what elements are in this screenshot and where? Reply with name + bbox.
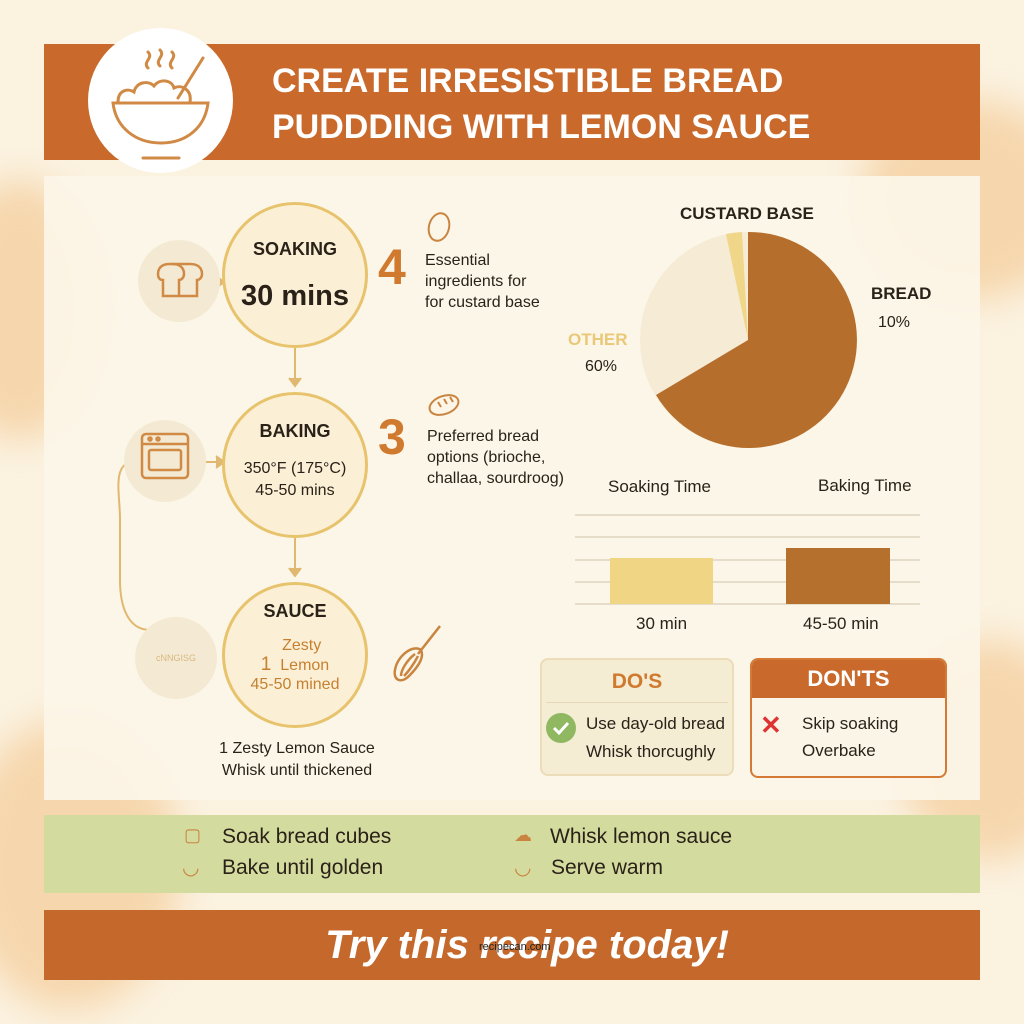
step: sauce: 45-50 mined <box>251 676 339 693</box>
step: baking: BAKING <box>260 421 330 441</box>
header band <box>44 44 980 160</box>
bar chart <box>575 476 920 633</box>
summary band: Soak bread cubes <box>222 825 391 848</box>
don'ts box: DON'TS <box>807 666 890 691</box>
fact: 4 ingredients: 4 <box>378 239 406 295</box>
fact: 4 ingredients <box>378 212 540 311</box>
step: sauce: 1 Lemon <box>261 654 329 675</box>
step: soaking: SOAKING <box>253 239 337 259</box>
step: soaking: 30 mins <box>241 280 349 312</box>
don'ts box <box>750 658 947 778</box>
icon: cross: ✕ <box>760 710 782 740</box>
summary band <box>44 815 980 893</box>
bar chart: 30 min <box>636 614 687 633</box>
side icon: faded label: cNNGISG <box>156 653 196 663</box>
pie chart <box>568 204 931 448</box>
summary band: Bake until golden <box>222 856 383 879</box>
footer banner: Try this recipe today! <box>325 923 729 967</box>
sauce caption: Whisk until thickened <box>222 762 372 779</box>
icon: check <box>546 713 576 743</box>
side icon: faded label <box>135 617 217 699</box>
sauce caption <box>219 740 375 779</box>
bar chart: Soaking Time <box>608 477 711 496</box>
step: baking: 45-50 mins <box>255 482 335 499</box>
fact: 3 breads: 3 <box>378 409 406 465</box>
do's box <box>540 658 734 776</box>
fact: 4 ingredients: Essential <box>425 252 490 269</box>
step: baking <box>222 392 368 538</box>
step: sauce: SAUCE <box>263 601 326 621</box>
icon: bowl: ◡ <box>514 857 531 879</box>
fact: 3 breads <box>378 394 564 487</box>
bar chart: 45-50 min <box>803 614 879 633</box>
step: sauce: Zesty <box>282 637 321 654</box>
do's box: Use day-old bread <box>586 714 725 733</box>
pie chart: 10% <box>878 314 910 331</box>
main panel <box>44 176 980 800</box>
step: soaking <box>222 202 368 348</box>
step: baking: 350°F (175°C) <box>244 460 346 477</box>
title: CREATE IRRESISTIBLE BREAD <box>272 62 783 100</box>
icon: whisk <box>393 625 441 682</box>
fact: 3 breads: options (brioche, <box>427 449 545 466</box>
do's box: DO'S <box>612 670 662 693</box>
fact: 3 breads: Preferred bread <box>427 428 539 445</box>
summary band: Serve warm <box>551 856 663 879</box>
pie chart: 60% <box>585 358 617 375</box>
don'ts box: Overbake <box>802 741 876 760</box>
title: PUDDDING WITH LEMON SAUCE <box>272 108 810 146</box>
do's box: Whisk thorcughly <box>586 742 715 761</box>
title <box>272 62 810 146</box>
pie chart: OTHER <box>568 330 628 349</box>
pie chart: CUSTARD BASE <box>680 204 814 223</box>
summary band: Whisk lemon sauce <box>550 825 732 848</box>
icon: bowl of bread pudding <box>88 28 233 173</box>
don'ts box: Skip soaking <box>802 714 898 733</box>
fact: 4 ingredients: for custard base <box>425 294 540 311</box>
step: sauce <box>222 582 368 728</box>
icon: bread small: ▢ <box>184 825 201 845</box>
side icon: bread <box>138 240 220 322</box>
icon: loaf <box>428 394 460 416</box>
sauce caption: 1 Zesty Lemon Sauce <box>219 740 375 757</box>
icon: egg <box>428 212 450 242</box>
footer banner <box>44 910 980 980</box>
side icon: oven <box>124 420 206 502</box>
footer banner: recipecan.com <box>479 941 551 953</box>
pie chart: BREAD <box>871 284 931 303</box>
icon: bowl small: ◡ <box>182 857 199 879</box>
fact: 4 ingredients: ingredients for <box>425 273 526 290</box>
icon: cloud: ☁ <box>514 825 532 845</box>
fact: 3 breads: challaa, sourdroog) <box>427 470 564 487</box>
bar chart: Baking Time <box>818 476 912 495</box>
